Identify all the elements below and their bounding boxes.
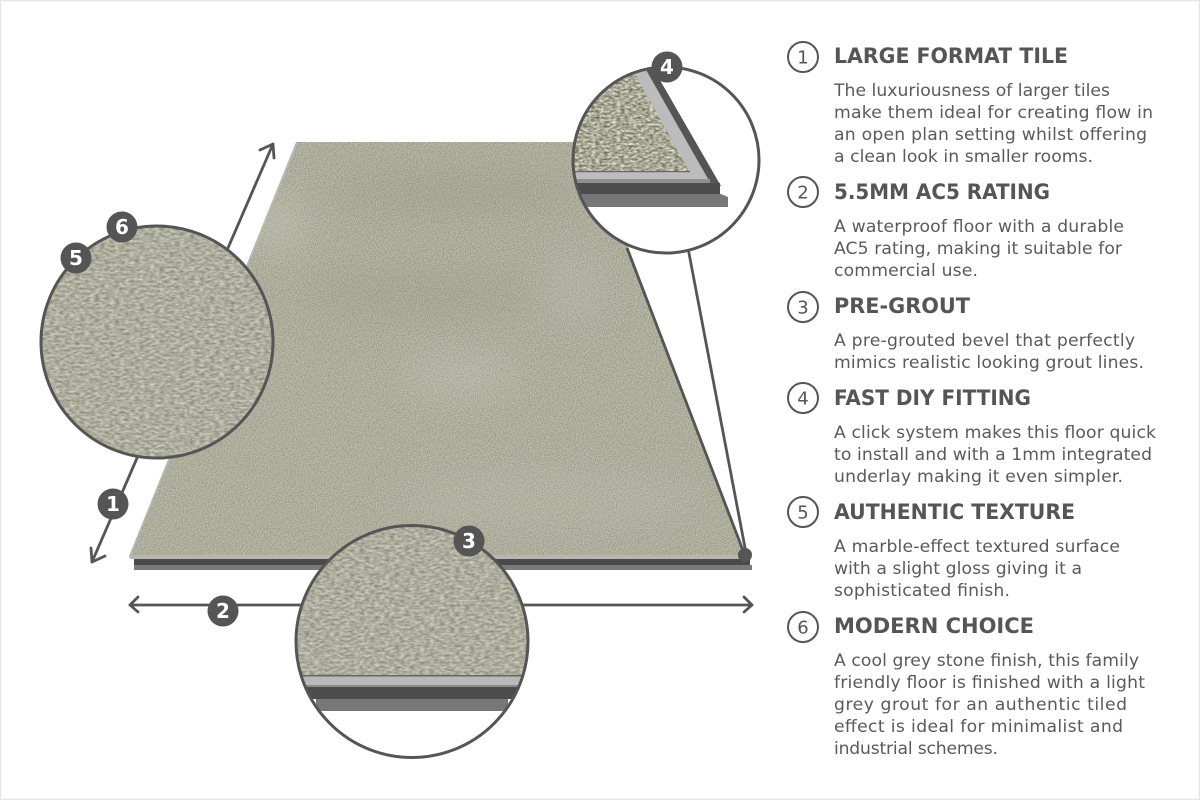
tile illustration [125, 138, 755, 570]
feature 3: pre-grout [788, 292, 1144, 373]
number 5: 5 [797, 502, 809, 524]
body 6: industrial schemes. [834, 739, 998, 759]
feature 6: modern choice [788, 612, 1145, 759]
badge 4: 4 [660, 55, 674, 79]
body 3: mimics realistic looking grout lines. [834, 353, 1144, 373]
leader lines to corner [627, 248, 746, 553]
heading 6: MODERN CHOICE [834, 614, 1034, 638]
feature 5: authentic texture [788, 497, 1120, 601]
number 1 [788, 42, 818, 72]
body 2 [834, 217, 1124, 281]
body 3 [834, 331, 1144, 373]
zoom circle: click system corner [560, 67, 759, 253]
badge 6 [106, 212, 138, 242]
heading 5: AUTHENTIC TEXTURE [834, 500, 1075, 524]
body 5: sophisticated finish. [834, 581, 1010, 601]
body 3: A pre-grouted bevel that perfectly [834, 331, 1135, 351]
corner marker dot [738, 548, 752, 562]
badge 3: 3 [462, 529, 476, 553]
number 4 [788, 383, 818, 413]
badge 1 [98, 488, 128, 520]
zoom circle: pre-grout edge [295, 524, 530, 758]
number 1: 1 [797, 48, 809, 68]
body 1: a clean look in smaller rooms. [834, 147, 1093, 167]
badge 2 [208, 596, 238, 626]
number 3: 3 [797, 298, 809, 318]
number 6 [788, 612, 818, 642]
body 4: to install and with a 1mm integrated [834, 445, 1152, 465]
heading 3: PRE-GROUT [834, 294, 971, 318]
body 1: an open plan setting whilst offering [834, 125, 1147, 145]
body 2: A waterproof floor with a durable [834, 217, 1124, 237]
body 1: The luxuriousness of larger tiles [833, 81, 1110, 101]
number 4: 4 [797, 388, 809, 410]
body 5: with a slight gloss giving it a [834, 559, 1082, 579]
badge 2: 2 [216, 599, 230, 623]
number 2: 2 [797, 182, 809, 204]
body 6 [834, 651, 1145, 759]
arrow: tile width [130, 597, 752, 612]
body 4 [834, 423, 1156, 487]
body 4: A click system makes this floor quick [834, 423, 1156, 443]
body 1: make them ideal for creating flow in [834, 103, 1153, 123]
badge 6: 6 [115, 215, 129, 239]
body 6: effect is ideal for minimalist and [834, 717, 1123, 737]
body 5 [834, 537, 1120, 601]
body 2: AC5 rating, making it suitable for [834, 239, 1123, 259]
body 1 [833, 81, 1153, 167]
arrow: tile length [91, 144, 274, 562]
number 6: 6 [797, 618, 809, 638]
badge 4 [652, 52, 682, 82]
number 2 [788, 177, 818, 207]
heading 4: FAST DIY FITTING [834, 386, 1031, 410]
zoom circle: surface texture [40, 225, 275, 460]
badge 5: 5 [69, 246, 83, 270]
heading 2: 5.5MM AC5 RATING [834, 180, 1050, 204]
number 3 [788, 292, 818, 322]
surface clouding [262, 168, 651, 508]
body 4: underlay making it even simpler. [834, 467, 1123, 487]
body 6: A cool grey stone finish, this family [834, 651, 1139, 671]
tile profile edge [129, 142, 752, 570]
body 6: friendly floor is finished with a light [834, 673, 1145, 693]
feature 1: large format tile [788, 42, 1153, 167]
feature 2: 5.5mm AC5 rating [788, 177, 1124, 281]
tile surface [125, 138, 755, 560]
number 5 [788, 497, 818, 527]
body 2: commercial use. [834, 261, 978, 281]
badge 1: 1 [106, 492, 120, 516]
body 5: A marble-effect textured surface [834, 537, 1120, 557]
feature 4: fast DIY fitting [788, 383, 1156, 487]
badge 5 [60, 242, 92, 274]
body 6: grey grout for an authentic tiled [834, 695, 1127, 715]
heading 1: LARGE FORMAT TILE [834, 44, 1068, 68]
badge 3 [454, 526, 484, 556]
